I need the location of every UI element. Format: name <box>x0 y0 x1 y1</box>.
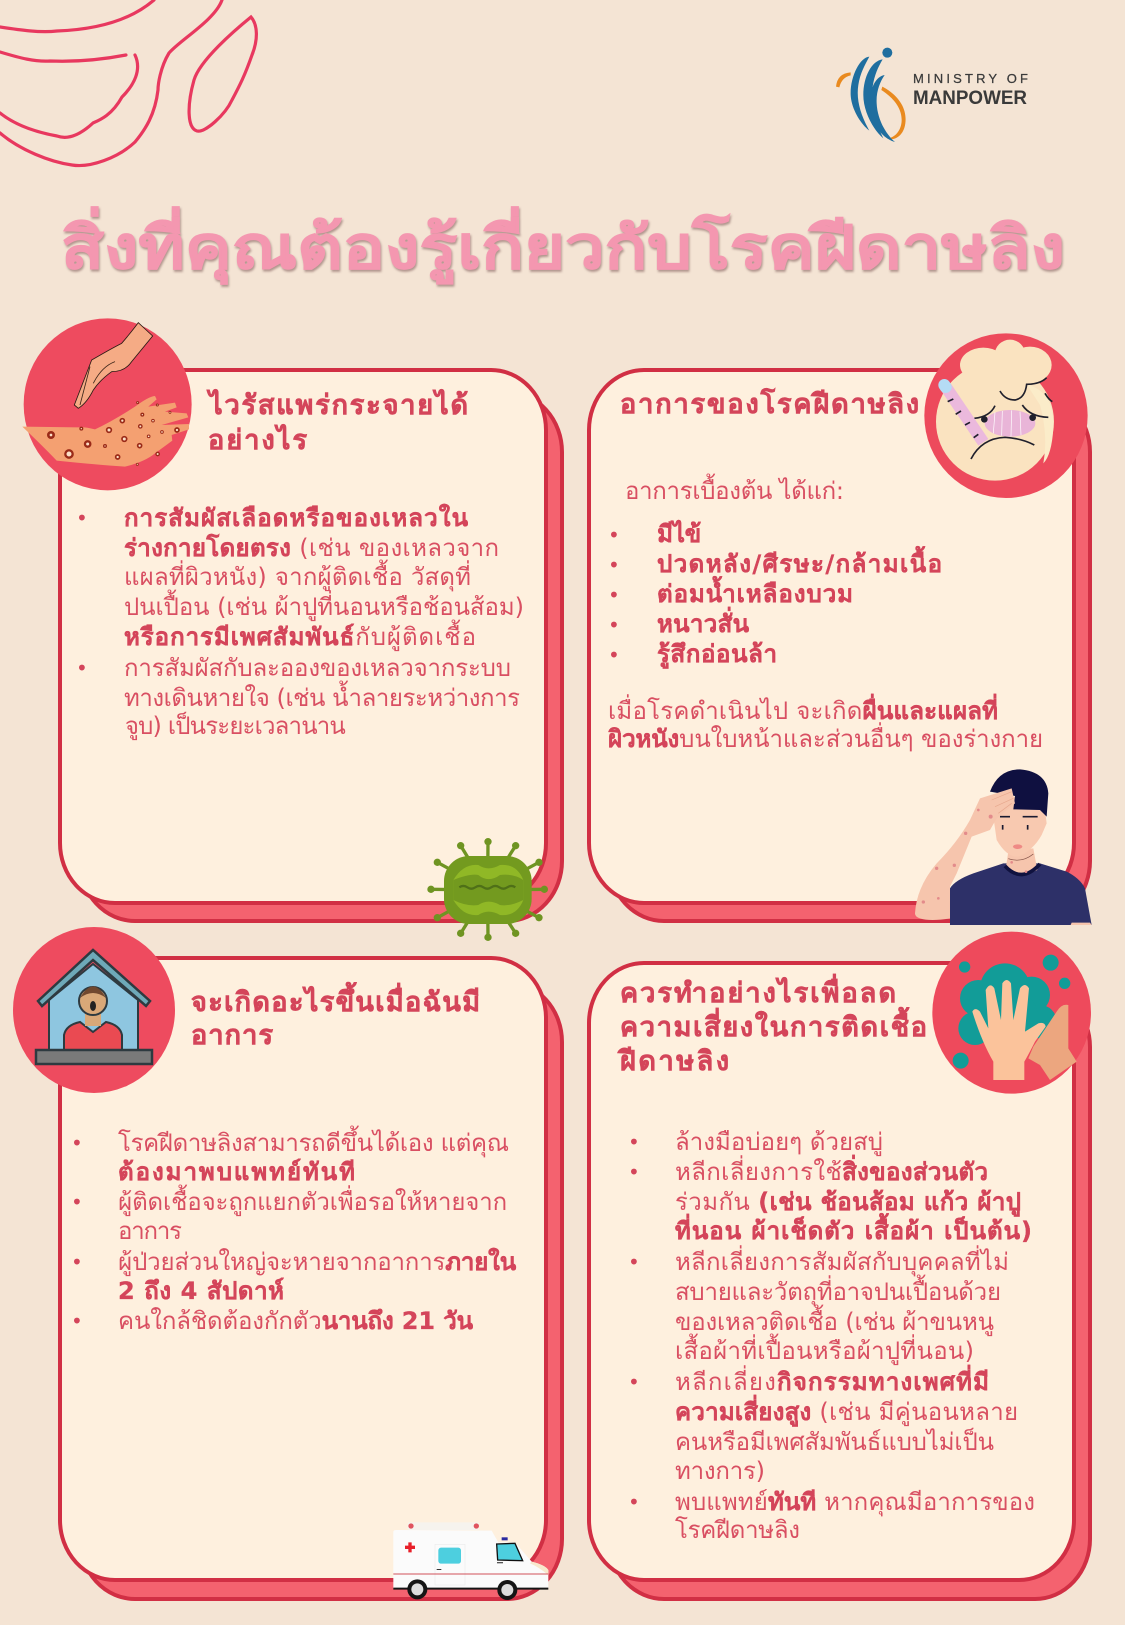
bullet list: ปนเปื้อน (เช่น ผ้าปูที่นอนหรือช้อนส้อม) <box>124 589 524 622</box>
bullet list: ของเหลวติดเชื้อ (เช่น ผ้าขนหนู <box>675 1304 994 1337</box>
bullet list: ความเสี่ยงสูง (เช่น มีคู่นอนหลาย <box>675 1394 1018 1427</box>
bullet list: การสัมผัสเลือดหรือของเหลวใน <box>124 503 469 532</box>
bullet list: • <box>608 643 620 667</box>
bullet list: โรคฝีดาษลิงสามารถดีขึ้นได้เอง แต่คุณ <box>118 1125 509 1158</box>
panel back layer <box>609 392 1090 921</box>
logo: Ministry of Manpower: MANPOWER <box>913 88 1027 109</box>
progression text: ผิวหนังบนใบหน้าและส่วนอื่นๆ ของร่างกาย <box>608 722 1043 753</box>
bullet list: ทางการ) <box>675 1457 765 1485</box>
bullet list: ผู้ป่วยส่วนใหญ่จะหายจากอาการภายใน <box>118 1247 517 1277</box>
bullet list: ที่นอน ผ้าเช็ดตัว เสื้อผ้า เป็นต้น) <box>675 1212 1032 1245</box>
bullet list: อาการ <box>118 1217 182 1245</box>
icon: hand touching rash <box>22 318 192 490</box>
bullet list <box>628 1128 1035 1544</box>
bullet list: • <box>71 1250 83 1274</box>
heading <box>206 389 468 456</box>
bullet list: • <box>628 1370 640 1394</box>
icon: person isolating at home <box>13 927 175 1093</box>
panel back layer <box>609 987 1090 1599</box>
logo text: MINISTRY OF <box>913 71 1028 86</box>
heading: ฝีดาษลิง <box>617 1046 729 1077</box>
intro text: อาการเบื้องต้น ได้แก่: <box>625 473 844 505</box>
bullet list: ร่างกายโดยตรง (เช่น ของเหลวจาก <box>124 533 499 562</box>
bullet list: การสัมผัสกับละอองของเหลวจากระบบ <box>124 654 511 682</box>
bullet list: หลีกเลี่ยงการใช้สิ่งของส่วนตัว <box>675 1154 988 1186</box>
heading: จะเกิดอะไรขึ้นเมื่อฉันมี <box>191 981 480 1018</box>
heading: ความเสี่ยงในการติดเชื้อ <box>620 1006 927 1043</box>
bullet list: คนหรือมีเพศสัมพันธ์แบบไม่เป็น <box>675 1427 994 1456</box>
heading: อาการ <box>191 1020 273 1051</box>
icon: sick face with thermometer <box>924 333 1088 498</box>
bullet list: • <box>76 506 88 530</box>
bullet list: • <box>608 583 620 607</box>
bullet list: • <box>76 656 88 680</box>
bullet list: • <box>71 1131 83 1155</box>
title: สิ่งที่คุณต้องรู้เกี่ยวกับโรคฝีดาษลิง <box>61 206 1065 285</box>
bullet list: ปวดหลัง/ศีรษะ/กล้ามเนื้อ <box>657 545 942 578</box>
progression text: เมื่อโรคดำเนินไป จะเกิดผื่นและแผลที่ <box>608 693 998 725</box>
bullet list: โรคฝีดาษลิง <box>675 1516 800 1544</box>
logo mark <box>836 48 906 142</box>
bullet list: • <box>608 553 620 577</box>
bullet list: 2 ถึง 4 สัปดาห์ <box>118 1277 284 1305</box>
heading <box>191 981 480 1051</box>
panel back layer <box>80 982 562 1599</box>
bullet list: • <box>608 613 620 637</box>
panel back layer <box>80 392 562 921</box>
bullet list: • <box>628 1490 640 1514</box>
bullet list: • <box>71 1190 83 1214</box>
decorative curved lines <box>0 0 256 166</box>
icon: virus <box>427 838 548 941</box>
bullet list: • <box>608 523 620 547</box>
heading: อาการของโรคฝีดาษลิง <box>620 387 919 420</box>
bullet list: จูบ) เป็นระยะเวลานาน <box>125 711 346 741</box>
panel front card <box>589 370 1074 903</box>
bullet list <box>71 1125 517 1335</box>
panel front card <box>60 370 546 903</box>
bullet list: • <box>628 1160 640 1184</box>
heading: ไวรัสแพร่กระจายได้ <box>206 389 468 421</box>
bullet list: • <box>628 1130 640 1154</box>
bullet list: คนใกล้ชิดต้องกักตัวนานถึง 21 วัน <box>118 1307 474 1335</box>
bullet list <box>608 519 942 669</box>
icon: ambulance <box>393 1522 548 1600</box>
bullet list: หรือการมีเพศสัมพันธ์กับผู้ติดเชื้อ <box>124 619 476 652</box>
progression text <box>608 693 1043 753</box>
bullet list: มีไข้ <box>657 519 701 548</box>
panel front card <box>589 963 1074 1580</box>
icon: man with rash touching forehead <box>915 769 1092 925</box>
bullet list: • <box>71 1309 83 1333</box>
bullet list: ร่วมกัน (เช่น ช้อนส้อม แก้ว ผ้าปู <box>675 1188 1021 1217</box>
bullet list: สบายและวัตถุที่อาจปนเปื้อนด้วย <box>675 1274 1001 1307</box>
bullet list: พบแพทย์ทันที หากคุณมีอาการของ <box>675 1488 1035 1517</box>
bullet list: ผู้ติดเชื้อจะถูกแยกตัวเพื่อรอให้หายจาก <box>118 1184 507 1217</box>
bullet list: รู้สึกอ่อนล้า <box>657 640 777 669</box>
icon: handwashing with soap <box>932 932 1091 1094</box>
panel front card <box>60 958 546 1580</box>
bullet list: เสื้อผ้าที่เปื้อนหรือผ้าปูที่นอน) <box>675 1333 974 1366</box>
bullet list: ต่อมน้ำเหลืองบวม <box>657 575 853 608</box>
panel: what happens if I have symptoms <box>13 927 562 1600</box>
panel: how the virus spreads <box>22 318 562 941</box>
bullet list: หลีกเลี่ยงการสัมผัสกับบุคคลที่ไม่ <box>675 1245 1009 1277</box>
heading: ควรทำอย่างไรเพื่อลด <box>620 973 896 1009</box>
bullet list: แผลที่ผิวหนัง) จากผู้ติดเชื้อ วัสดุที่ <box>124 559 471 592</box>
bullet list: หนาวสั่น <box>657 606 750 638</box>
heading: อย่างไร <box>208 424 307 456</box>
heading <box>617 973 927 1077</box>
bullet list: • <box>628 1250 640 1274</box>
bullet list <box>76 503 524 741</box>
bullet list: ทางเดินหายใจ (เช่น น้ำลายระหว่างการ <box>124 680 520 712</box>
bullet list: ล้างมือบ่อยๆ ด้วยสบู่ <box>675 1128 883 1157</box>
logo: Ministry of Manpower <box>836 48 1028 142</box>
panel: symptoms of monkeypox <box>589 333 1092 925</box>
panel: how to reduce risk <box>589 932 1091 1599</box>
bullet list: ต้องมาพบแพทย์ทันที <box>118 1158 355 1186</box>
bullet list: หลีกเลี่ยงกิจกรรมทางเพศที่มี <box>675 1364 989 1396</box>
